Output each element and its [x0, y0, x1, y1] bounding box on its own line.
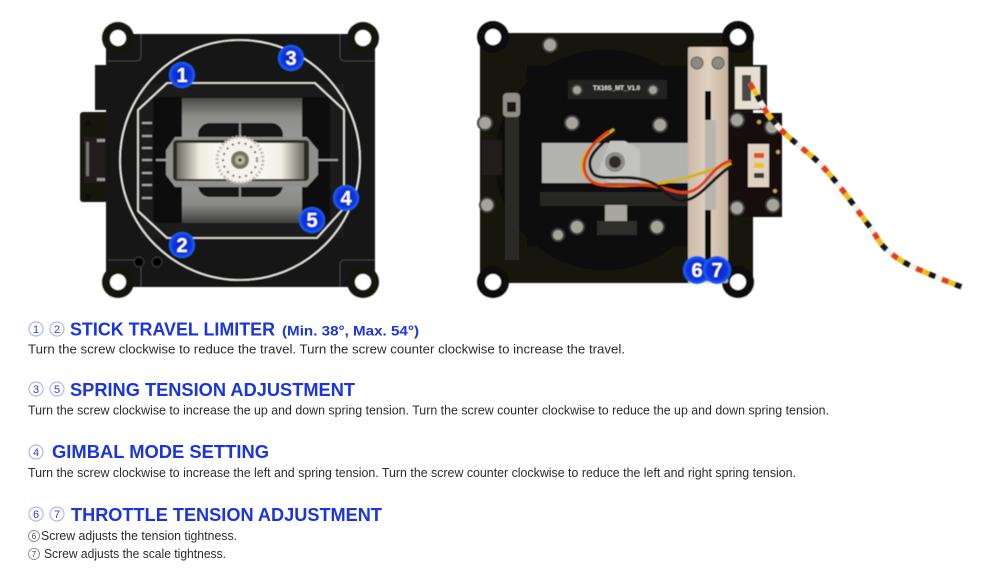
- markers 6 and 7: [29, 507, 64, 521]
- badge 1: 1: [176, 65, 188, 87]
- photo: gimbal front view: [80, 22, 379, 298]
- stick gear and lens: [217, 137, 263, 183]
- description: Turn the screw clockwise to reduce the travel. Turn the screw counter clockwise to increase the travel.: [28, 342, 625, 356]
- marker 4: 4: [33, 447, 39, 459]
- side circuit board: [80, 65, 109, 202]
- internal wires: [582, 130, 730, 201]
- description: Turn the screw clockwise to increase the left and spring tension. Turn the screw counter clockwise to reduce the left and right spring tension.: [28, 465, 796, 480]
- badge 4: [333, 185, 359, 211]
- heading: STICK TRAVEL LIMITER: [70, 320, 275, 340]
- range note: (Min. 38°, Max. 54°): [282, 322, 419, 338]
- hex screws: [478, 38, 780, 241]
- scale ticks: [142, 123, 152, 198]
- sensor board label: [568, 80, 667, 99]
- badge 6: [683, 256, 711, 284]
- badge 2: 2: [176, 235, 188, 257]
- markers 6 and 7: 7: [54, 509, 60, 521]
- markers 3 and 5: 5: [54, 384, 60, 396]
- circuit boards on the right: [728, 65, 782, 217]
- lower mechanism: [540, 192, 688, 235]
- photo: gimbal rear view: [477, 21, 962, 298]
- markers 1 and 2: [29, 322, 64, 336]
- rear plate: [477, 21, 754, 298]
- metal throttle bar: [688, 47, 728, 283]
- markers 1 and 2: 2: [54, 324, 60, 336]
- badge 1: [169, 62, 195, 88]
- badge 3: [278, 45, 304, 71]
- left side lever: [482, 93, 520, 260]
- mounting plate: [102, 22, 379, 298]
- silver arm: [542, 141, 705, 183]
- section: throttle tension adjustment: [28, 505, 382, 561]
- heading: GIMBAL MODE SETTING: [52, 442, 269, 462]
- badge 3: 3: [285, 48, 297, 70]
- badge 7: [703, 256, 731, 284]
- badge 5: 5: [306, 210, 318, 232]
- markers 3 and 5: 3: [33, 384, 39, 396]
- description: Turn the screw clockwise to increase the up and down spring tension. Turn the screw counter clockwise to reduce the up and down spring tension.: [28, 402, 829, 418]
- badge 7: 7: [711, 260, 723, 282]
- sensor board label: TX16S_MT_V1.0: [593, 86, 641, 92]
- stick window and silver gimbal frame: [153, 97, 338, 223]
- heading: THROTTLE TENSION ADJUSTMENT: [71, 505, 382, 525]
- marker 4: [29, 445, 43, 459]
- markers 3 and 5: [29, 382, 64, 396]
- markers 1 and 2: 1: [33, 324, 39, 336]
- highlight octagon: [138, 83, 344, 238]
- mechanical block: [585, 100, 645, 142]
- highlight circle: [120, 40, 360, 280]
- twisted servo cable: [750, 83, 962, 287]
- badge 6: 6: [691, 260, 703, 282]
- badge 5: [299, 207, 325, 233]
- markers 6 and 7: 6: [33, 509, 39, 521]
- note for screw 6: Screw adjusts the tension tightness.: [41, 528, 237, 543]
- section: stick travel limiter: [28, 320, 625, 356]
- note for screw 7: 7: [32, 550, 37, 559]
- badge 4: 4: [340, 188, 352, 210]
- note for screw 7: Screw adjusts the scale tightness.: [44, 546, 226, 561]
- badge 2: [169, 232, 195, 258]
- note for screw 6: 6: [32, 532, 37, 541]
- section: spring tension adjustment: [28, 380, 829, 418]
- heading: SPRING TENSION ADJUSTMENT: [70, 380, 355, 400]
- section: gimbal mode setting: [28, 442, 796, 480]
